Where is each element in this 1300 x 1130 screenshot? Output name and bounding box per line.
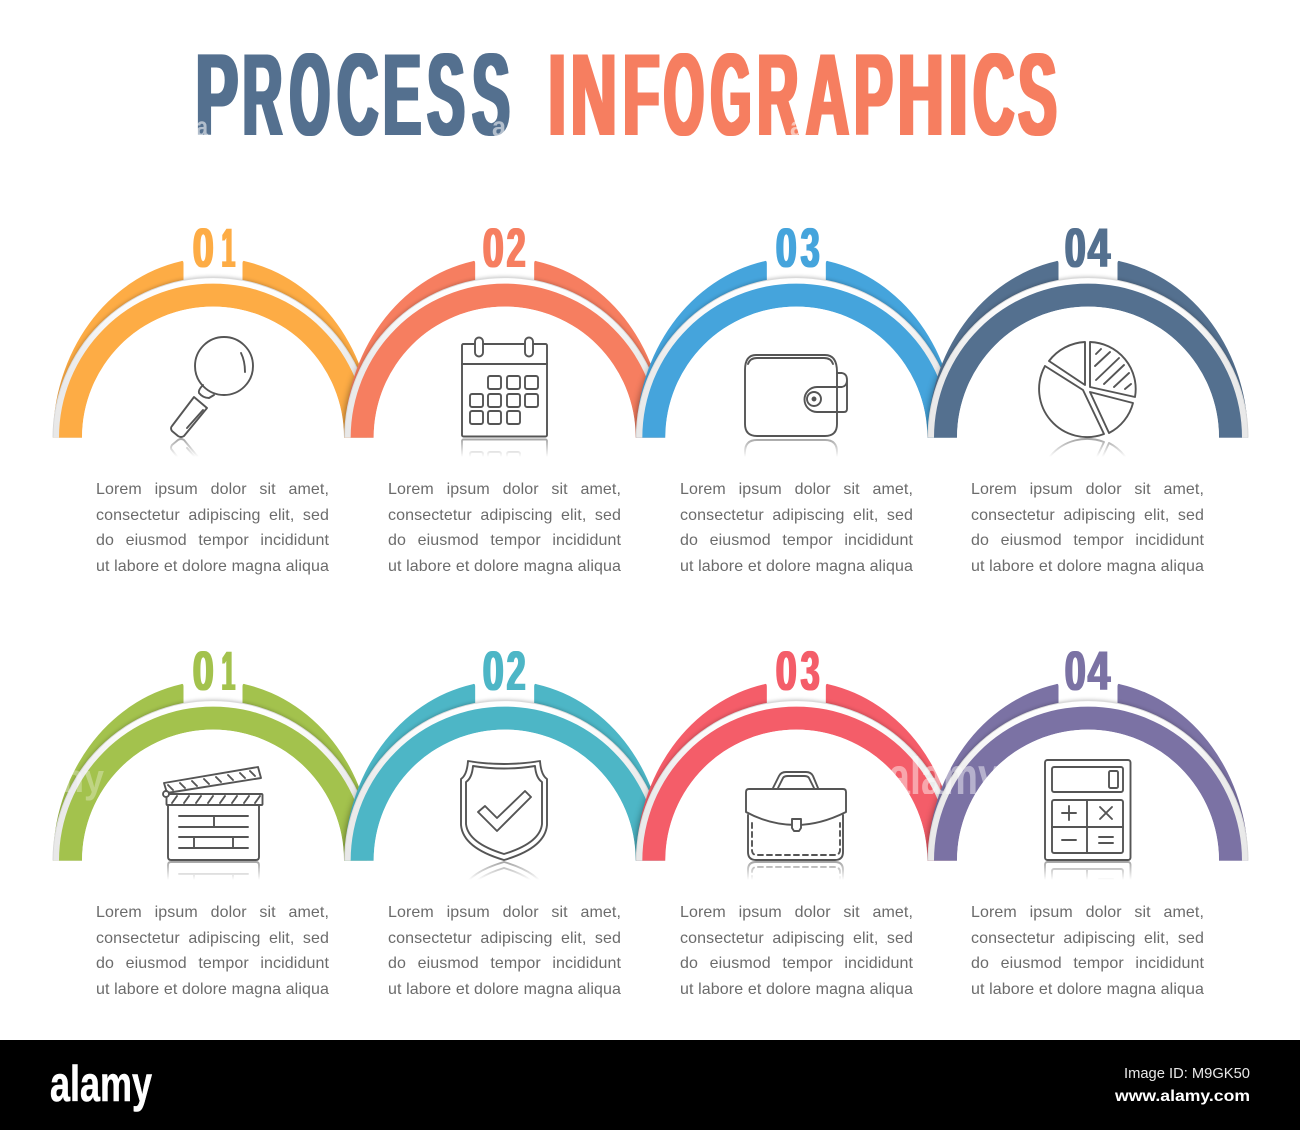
text block: top step 01: ut labore et dolore magna aliqua <box>96 558 329 575</box>
footer bar <box>0 1040 1300 1130</box>
text block: bottom step 03: Lorem ipsum dolor sit amet, <box>680 904 913 921</box>
number 02: 0 <box>483 639 504 702</box>
text block: top step 03: ut labore et dolore magna aliqua <box>680 558 913 575</box>
text block: bottom step 03 <box>680 904 913 998</box>
title word: process: O <box>290 29 330 160</box>
panel: bottom step 01 <box>52 639 374 1021</box>
number 03: 3 <box>801 216 820 279</box>
text block: top step 03: do eiusmod tempor incididunt <box>680 532 913 549</box>
title word: process: R <box>243 29 282 160</box>
title word: process: S <box>427 29 465 160</box>
title word: infographics: A <box>806 29 849 160</box>
title word: infographics: G <box>711 29 751 160</box>
text block: bottom step 01: Lorem ipsum dolor sit amet, <box>96 904 329 921</box>
title word: infographics: N <box>571 29 617 160</box>
text block: top step 02 <box>388 481 621 575</box>
number 03: 3 <box>801 639 820 702</box>
text block: bottom step 04: ut labore et dolore magna aliqua <box>971 981 1204 998</box>
icon: pie chart <box>1039 342 1136 437</box>
watermark fragments: alamy <box>888 747 1000 807</box>
title word: process: P <box>196 29 238 160</box>
number 02: 0 <box>483 216 504 279</box>
number 02: 2 <box>507 216 526 279</box>
number 04: 0 <box>1065 639 1086 702</box>
text block: top step 02: consectetur adipiscing elit, sed <box>388 507 621 524</box>
text block: top step 01: do eiusmod tempor incididunt <box>96 532 329 549</box>
text block: bottom step 04: do eiusmod tempor incididunt <box>971 955 1204 972</box>
watermark fragments: ny <box>62 757 105 801</box>
icon reflection: clapperboard <box>167 861 260 878</box>
number 01: 0 <box>193 639 214 702</box>
title word: infographics: F <box>623 29 660 160</box>
title word: infographics: P <box>854 29 893 160</box>
panel: bottom step 04 <box>924 651 1248 878</box>
panel: top step 01 <box>52 216 374 598</box>
number 04 <box>1065 216 1110 279</box>
title word: infographics: R <box>757 29 798 160</box>
text block: top step 04: ut labore et dolore magna aliqua <box>971 558 1204 575</box>
title word: infographics: H <box>898 29 944 160</box>
icon reflection: calendar <box>461 438 548 456</box>
panel: top step 04 <box>924 228 1248 456</box>
watermark fragments <box>62 111 1000 807</box>
text block: top step 01: consectetur adipiscing elit, sed <box>96 507 329 524</box>
number 02: 2 <box>507 639 526 702</box>
text block: bottom step 01: ut labore et dolore magna aliqua <box>96 981 329 998</box>
image id: Image ID: M9GK50 <box>1124 1065 1250 1082</box>
number 03: 0 <box>776 216 797 279</box>
icon reflection: calculator <box>1044 861 1132 878</box>
text block: bottom step 03: consectetur adipiscing elit, sed <box>680 930 913 947</box>
text block: bottom step 04: consectetur adipiscing elit, sed <box>971 930 1204 947</box>
text block: top step 03: Lorem ipsum dolor sit amet, <box>680 481 913 498</box>
icon: calculator <box>1045 760 1130 860</box>
panel: bottom step 02 <box>344 639 665 1021</box>
icon reflection: shield <box>470 861 538 878</box>
icon: clapperboard <box>163 767 262 860</box>
panel: top step 01: 1 <box>222 216 235 279</box>
semicircle arch 01 orange <box>52 260 373 438</box>
title word: infographics: I <box>548 29 566 160</box>
text: S <box>1018 29 1057 160</box>
text block: top step 02: Lorem ipsum dolor sit amet, <box>388 481 621 498</box>
icon: briefcase <box>746 772 846 860</box>
text block: bottom step 01: do eiusmod tempor incididunt <box>96 955 329 972</box>
title word: infographics: O <box>664 29 704 160</box>
watermark fragments: a <box>196 111 208 142</box>
icon reflection: briefcase <box>747 861 844 878</box>
title word: process: C <box>337 29 378 160</box>
panel: top step 02 <box>344 216 665 598</box>
number 03: 0 <box>776 639 797 702</box>
text block: top step 04: do eiusmod tempor incididunt <box>971 532 1204 549</box>
icon: shield with check <box>461 761 547 860</box>
text block: top step 01 <box>96 481 329 575</box>
title word: process <box>196 29 510 160</box>
text block: top step 01: Lorem ipsum dolor sit amet, <box>96 481 329 498</box>
website: www.alamy.com <box>1114 1088 1250 1105</box>
text block: top step 02: do eiusmod tempor incididunt <box>388 532 621 549</box>
text block: top step 03: consectetur adipiscing elit, sed <box>680 507 913 524</box>
semicircle arch 04 navy <box>924 260 1248 438</box>
icon reflection: wallet <box>744 439 838 456</box>
title: S <box>472 29 510 160</box>
text block: bottom step 02 <box>388 904 621 998</box>
text block: bottom step 04: Lorem ipsum dolor sit amet, <box>971 904 1204 921</box>
text block: bottom step 01 <box>96 904 329 998</box>
icon reflection: pie chart <box>1050 438 1125 456</box>
semicircle arch 04 purple <box>924 684 1248 861</box>
text block: bottom step 03: ut labore et dolore magna aliqua <box>680 981 913 998</box>
title word: infographics: C <box>973 29 1014 160</box>
watermark fragments: a <box>492 111 506 142</box>
number 04: 0 <box>1065 216 1086 279</box>
text block: bottom step 01: consectetur adipiscing elit, sed <box>96 930 329 947</box>
text block: top step 02: ut labore et dolore magna aliqua <box>388 558 621 575</box>
panel: bottom step 01: 1 <box>222 639 235 702</box>
panel: bottom step 03 <box>636 639 957 1021</box>
number 04: 4 <box>1088 639 1110 702</box>
semicircle arch 01 green <box>52 684 373 861</box>
title word: process: E <box>383 29 421 160</box>
semicircle arch 02 coral <box>341 260 664 438</box>
number 04: 4 <box>1088 216 1110 279</box>
text block: bottom step 02: Lorem ipsum dolor sit amet, <box>388 904 621 921</box>
text block: bottom step 02: consectetur adipiscing elit, sed <box>388 930 621 947</box>
text block: bottom step 03: do eiusmod tempor incididunt <box>680 955 913 972</box>
icon: calendar <box>462 338 547 436</box>
semicircle arch 02 teal <box>342 684 664 861</box>
semicircle arch 03 blue <box>633 260 956 438</box>
text block: top step 04: Lorem ipsum dolor sit amet, <box>971 481 1204 498</box>
number 04 <box>1065 639 1110 702</box>
text block: top step 04: consectetur adipiscing elit, sed <box>971 507 1204 524</box>
text block: top step 03 <box>680 481 913 575</box>
footer logo: alamy <box>50 1056 152 1112</box>
watermark fragments: a <box>790 111 804 142</box>
text block: top step 04 <box>971 481 1204 575</box>
icon: wallet <box>745 355 847 436</box>
text block: bottom step 02: ut labore et dolore magna aliqua <box>388 981 621 998</box>
title word: infographics <box>548 29 1057 160</box>
icon: magnifying glass <box>171 337 253 437</box>
text block: bottom step 02: do eiusmod tempor incididunt <box>388 955 621 972</box>
text block: bottom step 04 <box>971 904 1204 998</box>
number 01: 0 <box>193 216 214 279</box>
semicircle arch 03 red <box>633 684 956 861</box>
title <box>196 29 1057 160</box>
panel: top step 03 <box>636 216 957 598</box>
icon reflection: magnifying glass <box>170 438 198 456</box>
title word: infographics: I <box>948 29 968 160</box>
